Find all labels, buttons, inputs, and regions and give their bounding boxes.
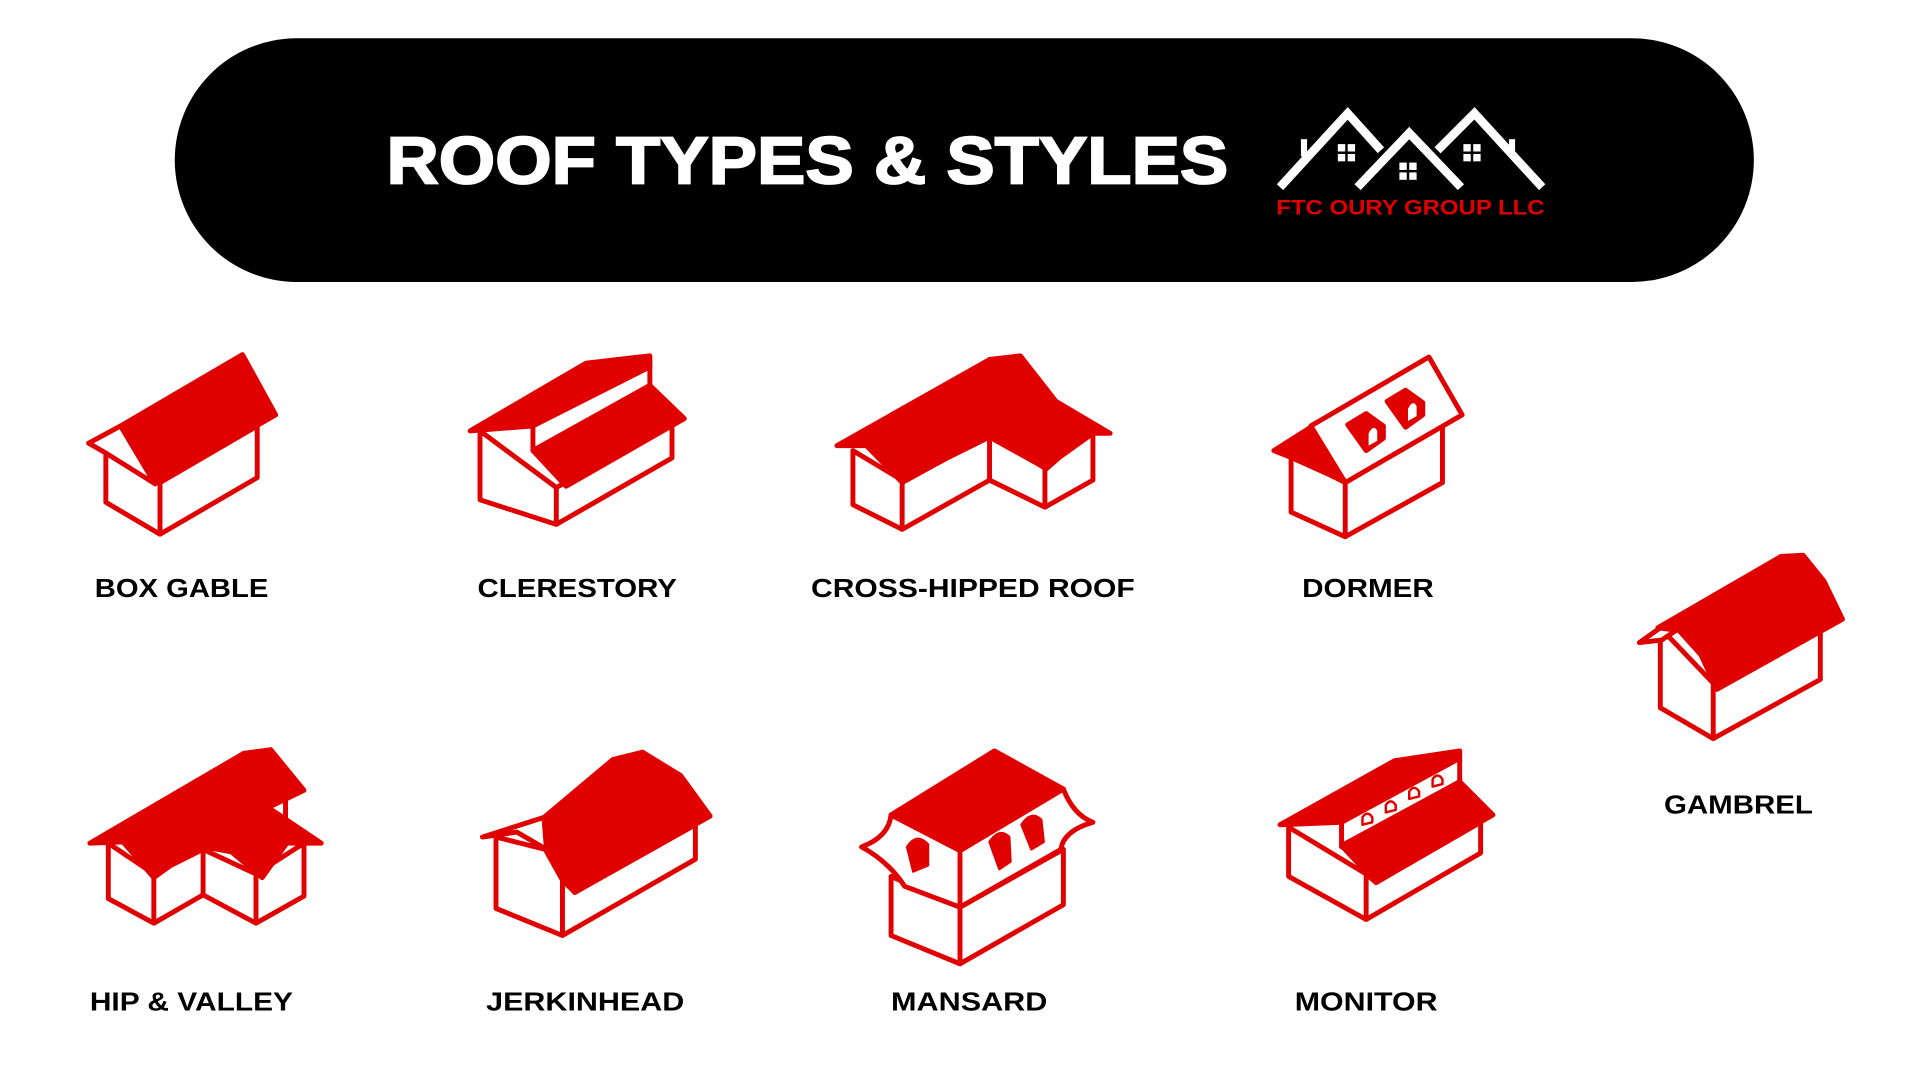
- icon: cross-hipped roof: [837, 356, 1110, 529]
- label: hip and valley: HIP & VALLEY: [90, 989, 293, 1017]
- label: monitor: MONITOR: [1295, 989, 1438, 1017]
- icon: monitor: [1280, 751, 1493, 920]
- label: clerestory: CLERESTORY: [478, 575, 677, 603]
- icon: mansard: [862, 751, 1093, 964]
- label: box gable: BOX GABLE: [95, 575, 268, 603]
- icon: clerestory: [470, 356, 684, 524]
- label: dormer: DORMER: [1302, 575, 1434, 603]
- logo: FTC OURY GROUP LLC: [1276, 196, 1545, 219]
- label: jerkinhead: JERKINHEAD: [486, 989, 684, 1017]
- icon: hip and valley: [90, 750, 321, 923]
- icon: box gable: [89, 355, 276, 534]
- logo: [1276, 113, 1545, 219]
- icon: dormer: [1274, 357, 1462, 537]
- label: cross-hipped roof: CROSS-HIPPED ROOF: [811, 575, 1135, 603]
- label: gambrel: GAMBREL: [1664, 792, 1813, 820]
- label: mansard: MANSARD: [891, 989, 1047, 1017]
- icon: jerkinhead: [482, 752, 710, 936]
- icon: gambrel: [1639, 555, 1842, 739]
- header banner: [175, 38, 1754, 282]
- title: ROOF TYPES & STYLES: [386, 124, 1228, 198]
